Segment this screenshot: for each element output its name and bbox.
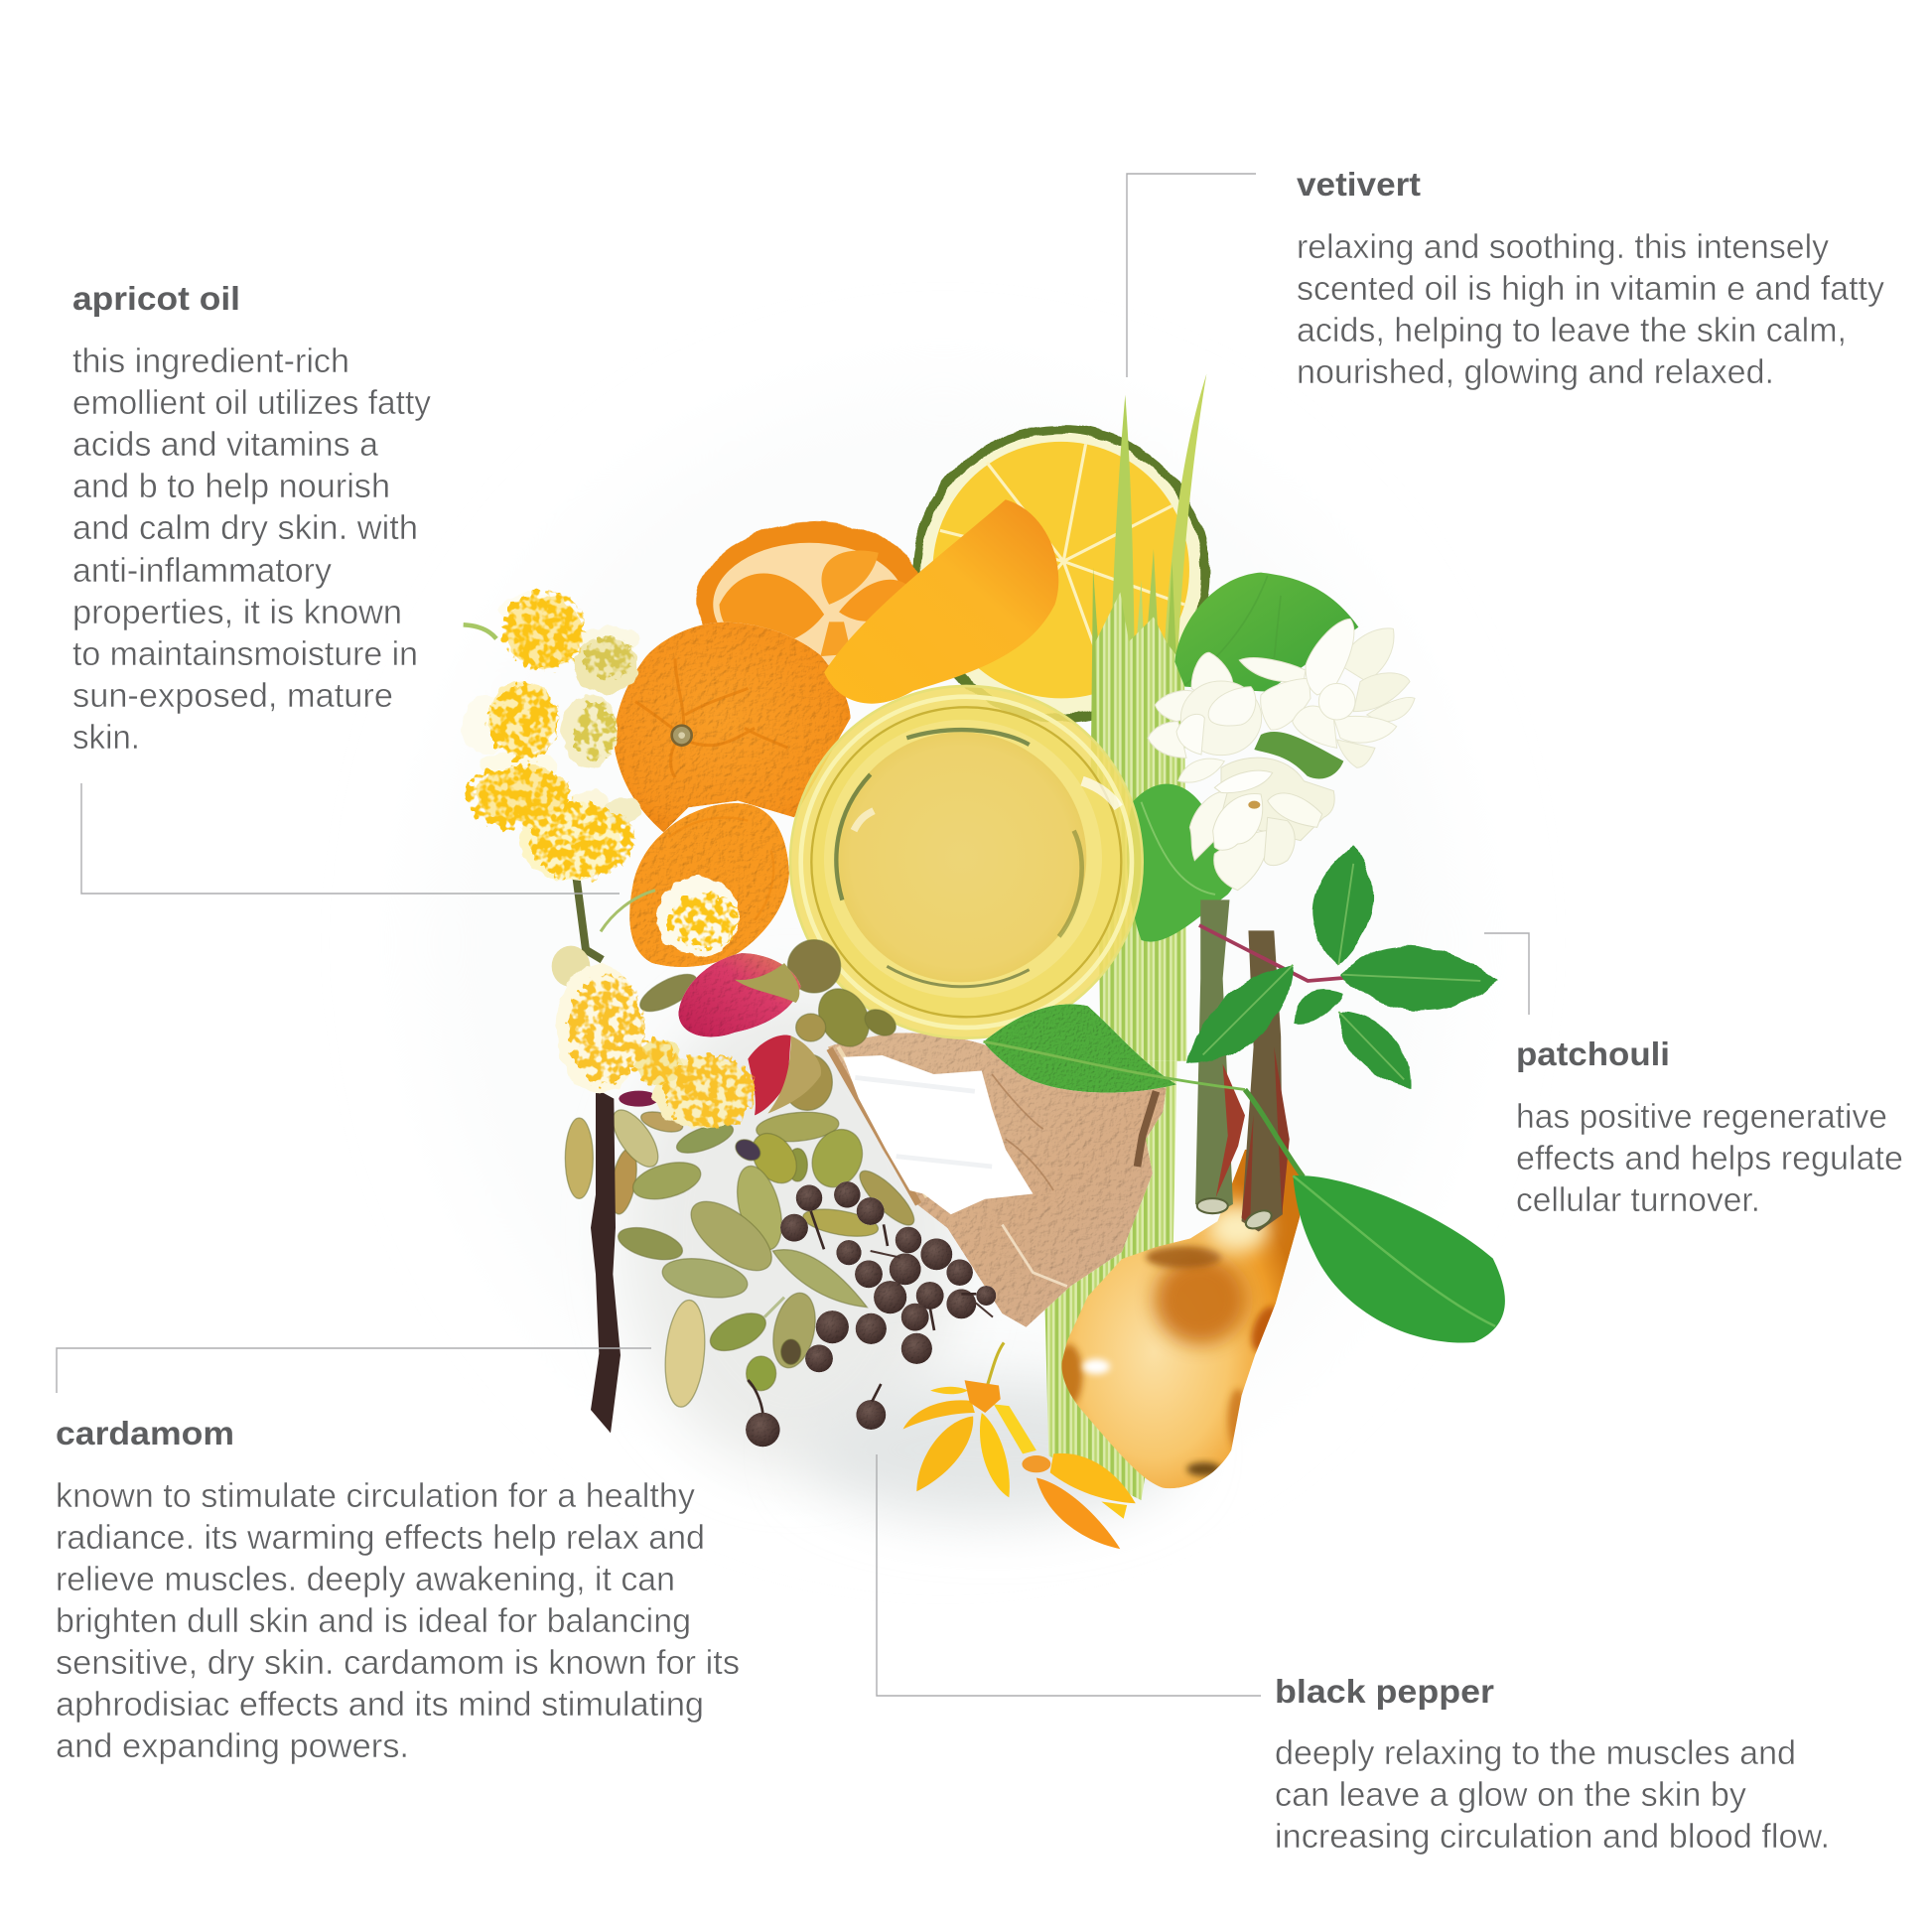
- text block: apricot oil: skin.: [72, 719, 140, 757]
- leader line: apricot oil: [81, 783, 620, 894]
- soft shadow: [427, 387, 1459, 1519]
- yellow and orange flowers: [903, 1342, 1136, 1549]
- text block: cardamom: and expanding powers.: [56, 1727, 409, 1765]
- text block: vetivert: vetivert: [1297, 167, 1421, 204]
- text block: black pepper: black pepper: [1275, 1674, 1494, 1711]
- text block: black pepper: can leave a glow on the skin by: [1275, 1776, 1747, 1814]
- text block: black pepper: [1275, 1674, 1830, 1856]
- text block: cardamom: known to stimulate circulation for a healthy: [56, 1477, 696, 1515]
- oil bowl: [790, 686, 1143, 1038]
- text block: black pepper: deeply relaxing to the muscles and: [1275, 1734, 1796, 1772]
- text block: cardamom: relieve muscles. deeply awakening, it can: [56, 1561, 675, 1598]
- leader line: cardamom: [57, 1348, 651, 1393]
- top jasmine leaf: [1174, 573, 1358, 692]
- lower large leaf: [1293, 1175, 1505, 1342]
- text block: vetivert: relaxing and soothing. this intensely: [1297, 228, 1830, 266]
- text block: apricot oil: anti-inflammatory: [72, 552, 333, 590]
- jasmine stamen: [1248, 801, 1260, 809]
- text block: apricot oil: to maintainsmoisture in: [72, 635, 418, 673]
- text block: apricot oil: sun-exposed, mature: [72, 677, 393, 715]
- text block: apricot oil: emollient oil utilizes fatty: [72, 384, 432, 422]
- text block: apricot oil: and calm dry skin. with: [72, 509, 418, 547]
- cardamom pods: [565, 940, 921, 1409]
- coconut butter on bark: [828, 1033, 1167, 1327]
- leader line: black pepper: [877, 1454, 1261, 1696]
- text block: black pepper: increasing circulation and blood flow.: [1275, 1818, 1830, 1856]
- text block: patchouli: cellular turnover.: [1516, 1181, 1760, 1219]
- text block: patchouli: effects and helps regulate: [1516, 1140, 1903, 1177]
- vetiver grass lower bundle: [1038, 1061, 1177, 1500]
- black peppercorns: [746, 1181, 996, 1447]
- mandarin slice: [692, 514, 926, 680]
- amber resin, patchouli twigs and flowers: [903, 899, 1304, 1549]
- leader line: vetivert: [1127, 174, 1256, 377]
- upper large leaf: [983, 1004, 1304, 1176]
- text block: patchouli: patchouli: [1516, 1036, 1670, 1073]
- text block: vetivert: scented oil is high in vitamin e and fatty: [1297, 270, 1885, 308]
- patchouli twigs: [1195, 899, 1290, 1232]
- text block: cardamom: cardamom: [56, 1416, 234, 1452]
- text block: vetivert: acids, helping to leave the skin calm,: [1297, 312, 1847, 349]
- vetiver grass upper blades: [1091, 374, 1206, 1061]
- twig stem, rose buds and lower blossoms: [552, 946, 821, 1433]
- text block: apricot oil: this ingredient-rich: [72, 343, 349, 380]
- text block: vetivert: nourished, glowing and relaxed.: [1297, 353, 1774, 391]
- jasmine flower right: [1239, 619, 1415, 767]
- leader line: patchouli: [1484, 933, 1529, 1015]
- text block: apricot oil: apricot oil: [72, 281, 240, 318]
- whole mandarin and dried apricot: [615, 622, 851, 967]
- jasmine flower left: [1148, 652, 1262, 782]
- text block: vetivert: [1297, 167, 1885, 391]
- jasmine flowers and top leaf: [1148, 573, 1415, 891]
- text block: cardamom: radiance. its warming effects help relax and: [56, 1519, 705, 1557]
- botanical ingredient still life: [463, 374, 1505, 1549]
- yellow blossom clusters: [463, 591, 740, 960]
- text block: apricot oil: acids and vitamins a: [72, 426, 379, 464]
- patchouli leaves and stems: [1186, 845, 1499, 1088]
- jasmine calyx: [1254, 732, 1343, 779]
- text block: cardamom: [56, 1416, 740, 1765]
- jasmine flower bottom: [1189, 758, 1334, 891]
- peach slice: [824, 499, 1058, 704]
- text block: apricot oil: properties, it is known: [72, 594, 402, 631]
- text block: apricot oil: [72, 281, 432, 757]
- amber resin: [1055, 1150, 1304, 1488]
- text block: cardamom: sensitive, dry skin. cardamom is known for its: [56, 1644, 740, 1682]
- text block: cardamom: aphrodisiac effects and its mind stimulating: [56, 1686, 704, 1724]
- bergamot slice: [916, 429, 1205, 718]
- text block: cardamom: brighten dull skin and is ideal for balancing: [56, 1602, 691, 1640]
- lower jasmine leaf: [1127, 784, 1234, 942]
- text block: patchouli: has positive regenerative: [1516, 1098, 1887, 1136]
- text block: apricot oil: and b to help nourish: [72, 468, 390, 505]
- text block: patchouli: [1516, 1036, 1903, 1219]
